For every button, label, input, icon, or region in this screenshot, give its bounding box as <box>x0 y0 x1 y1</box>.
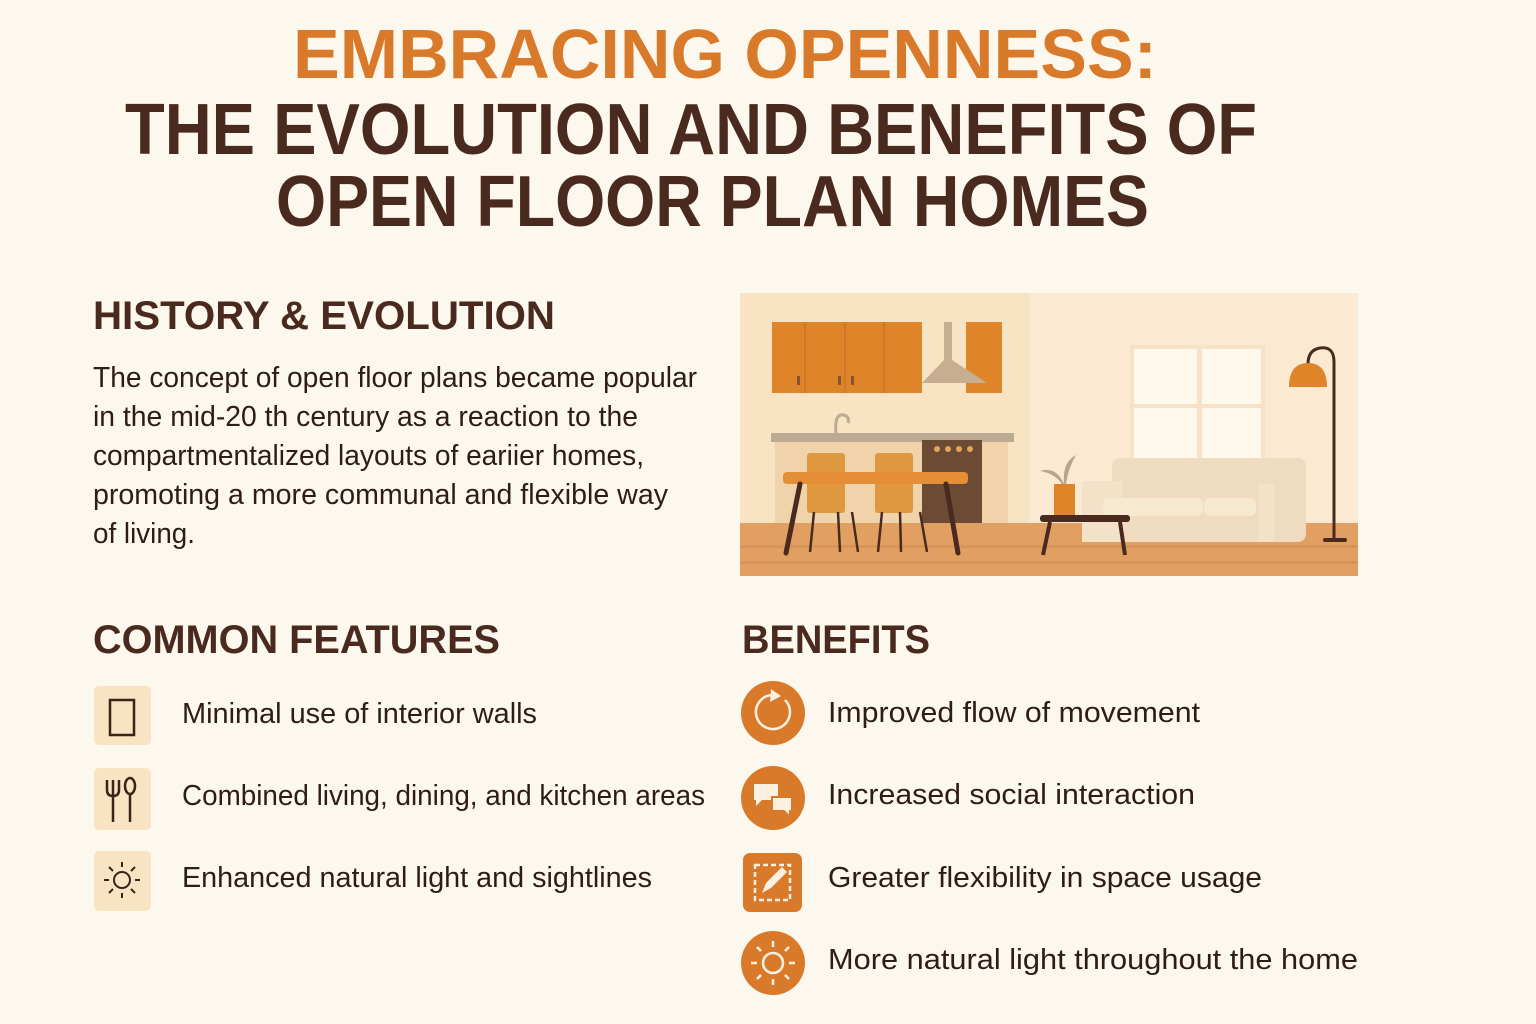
text block: history paragraph: compartmentalized layouts of eariier homes, <box>93 440 644 472</box>
benefit: flow <box>741 681 1200 745</box>
feature: combined areas: Combined living, dining, and kitchen areas <box>182 780 705 812</box>
benefit: flexibility: Greater flexibility in space usage <box>828 862 1262 894</box>
title <box>125 15 1257 242</box>
text block: history paragraph: of living. <box>93 518 195 550</box>
heading: common features: COMMON FEATURES <box>93 618 500 662</box>
text block: history paragraph: in the mid-20 th century as a reaction to the <box>93 401 638 433</box>
benefit: social <box>741 766 1195 830</box>
text block: history paragraph <box>93 362 697 550</box>
table <box>783 472 968 484</box>
benefit: social: Increased social interaction <box>828 779 1195 811</box>
heading: history & evolution: HISTORY & EVOLUTION <box>93 294 555 338</box>
cabinets <box>772 322 922 393</box>
feature: minimal walls: Minimal use of interior walls <box>182 698 537 730</box>
hood <box>922 322 987 383</box>
plant <box>1054 484 1075 516</box>
heading: benefits: BENEFITS <box>742 618 930 662</box>
feature: minimal walls <box>94 686 537 745</box>
feature: natural light: Enhanced natural light and sightlines <box>182 862 652 894</box>
feature: natural light <box>94 851 652 911</box>
benefit: flow: Improved flow of movement <box>828 697 1200 729</box>
text block: history paragraph: The concept of open floor plans became popular <box>93 362 697 394</box>
illustration: open floor plan interior <box>740 293 1358 576</box>
benefit: flexibility <box>743 853 1262 912</box>
lamp <box>1308 348 1334 540</box>
text block: history paragraph: promoting a more communal and flexible way <box>93 479 668 511</box>
stove <box>922 440 982 523</box>
coffee table <box>1040 515 1130 522</box>
sofa <box>1112 458 1306 542</box>
title: OPEN FLOOR PLAN HOMES <box>276 162 1149 242</box>
window <box>1130 345 1265 471</box>
title: EMBRACING OPENNESS: <box>293 15 1157 93</box>
title: THE EVOLUTION AND BENEFITS OF <box>125 90 1257 170</box>
chairs <box>807 453 845 513</box>
counter <box>775 441 1008 523</box>
benefit: natural light: More natural light throughout the home <box>828 944 1358 976</box>
feature: combined areas <box>94 768 705 830</box>
benefit: natural light <box>741 931 1358 995</box>
